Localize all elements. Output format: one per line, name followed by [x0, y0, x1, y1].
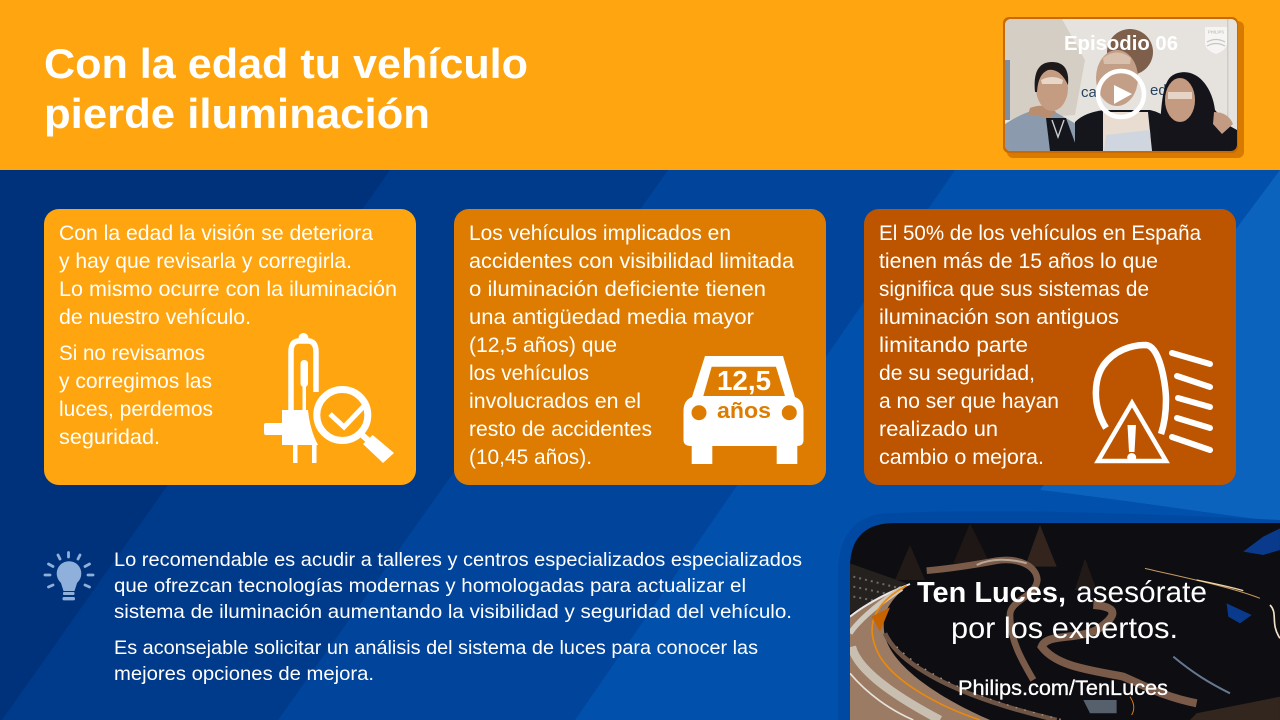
photo panel: night road call to action: [850, 523, 1280, 720]
panel text: vehicle age: [879, 222, 1201, 469]
call to action text: asesórate: [1076, 576, 1207, 609]
icon: car with age: [684, 356, 804, 464]
call to action text: por los expertos.: [951, 612, 1178, 645]
icon: car with age: años: [717, 398, 771, 423]
panel text: accidents: (12,5 años) que: [469, 334, 617, 357]
icon: play button: [1098, 71, 1144, 117]
panel text: vehicle age: de su seguridad,: [879, 362, 1035, 385]
panel text: vision: y corregimos las: [59, 370, 212, 393]
video thumbnail: ca: [1081, 84, 1098, 101]
panel: vehicle age in Spain: [864, 209, 1236, 485]
recommendation text: sistema de iluminación aumentando la visibilidad y seguridad del vehículo.: [114, 601, 792, 623]
icon: headlamp warning: [1096, 345, 1210, 462]
recommendation text: [114, 549, 802, 685]
panel: vision: [44, 209, 416, 485]
icon: bulb with magnifier: [264, 333, 394, 463]
title: pierde iluminación: [44, 90, 430, 137]
panel text: vision: de nuestro vehículo.: [59, 306, 251, 329]
call to action text: Ten Luces,: [917, 577, 1066, 609]
panel text: accidents: involucrados en el: [469, 390, 641, 413]
panel text: vehicle age: tienen más de 15 años lo que: [879, 250, 1158, 273]
icon: light bulb tip: [45, 552, 93, 600]
panel text: accidents: o iluminación deficiente tienen: [469, 278, 766, 301]
panel text: vehicle age: El 50% de los vehículos en España: [879, 222, 1201, 245]
panel text: accidents: accidentes con visibilidad limitada: [469, 250, 794, 273]
panel text: vision: Con la edad la visión se deteriora: [59, 222, 373, 245]
panel text: vision: luces, perdemos: [59, 398, 213, 421]
panel text: vision: [59, 222, 397, 449]
background: diagonal blue bands: [0, 170, 1280, 720]
panel text: vehicle age: a no ser que hayan: [879, 390, 1059, 413]
panel text: vision: y hay que revisarla y corregirla.: [59, 250, 352, 273]
panel text: accidents: [469, 222, 794, 469]
video thumbnail: [1003, 17, 1244, 158]
title: Con la edad tu vehículo: [44, 40, 528, 87]
icon: car with age: 12,5: [717, 365, 771, 396]
panel text: vision: seguridad.: [59, 426, 160, 449]
panel text: vehicle age: limitando parte: [879, 334, 1028, 357]
episode label: Episodio 06: [1064, 33, 1178, 55]
panel text: accidents: los vehículos: [469, 362, 589, 385]
panel text: accidents: una antigüedad media mayor: [469, 306, 754, 329]
panel text: accidents: resto de accidentes: [469, 418, 652, 441]
panel text: accidents: (10,45 años).: [469, 446, 592, 469]
panel text: vehicle age: realizado un: [879, 418, 998, 441]
call to action text: Philips.com/TenLuces: [958, 677, 1168, 700]
icon: philips shield: PHILIPS: [1208, 30, 1224, 34]
panel: accidents: [454, 209, 826, 485]
panel text: vision: Si no revisamos: [59, 342, 205, 365]
panel text: vehicle age: significa que sus sistemas de: [879, 278, 1149, 301]
panel text: vehicle age: cambio o mejora.: [879, 446, 1044, 469]
call to action text: [917, 576, 1207, 700]
recommendation text: Es aconsejable solicitar un análisis del sistema de luces para conocer las: [114, 637, 758, 659]
recommendation text: que ofrezcan tecnologías modernas y homologadas para actualizar el: [114, 575, 746, 597]
icon: philips shield: [1205, 27, 1227, 54]
video thumbnail: ed: [1150, 82, 1167, 99]
title: [44, 40, 528, 137]
header band: [0, 0, 1280, 170]
recommendation text: Lo recomendable es acudir a talleres y centros especializados especializados: [114, 549, 802, 571]
panel text: vision: Lo mismo ocurre con la iluminación: [59, 278, 397, 301]
panel text: vehicle age: iluminación son antiguos: [879, 306, 1119, 329]
recommendation text: mejores opciones de mejora.: [114, 663, 374, 685]
panel text: accidents: Los vehículos implicados en: [469, 222, 731, 245]
